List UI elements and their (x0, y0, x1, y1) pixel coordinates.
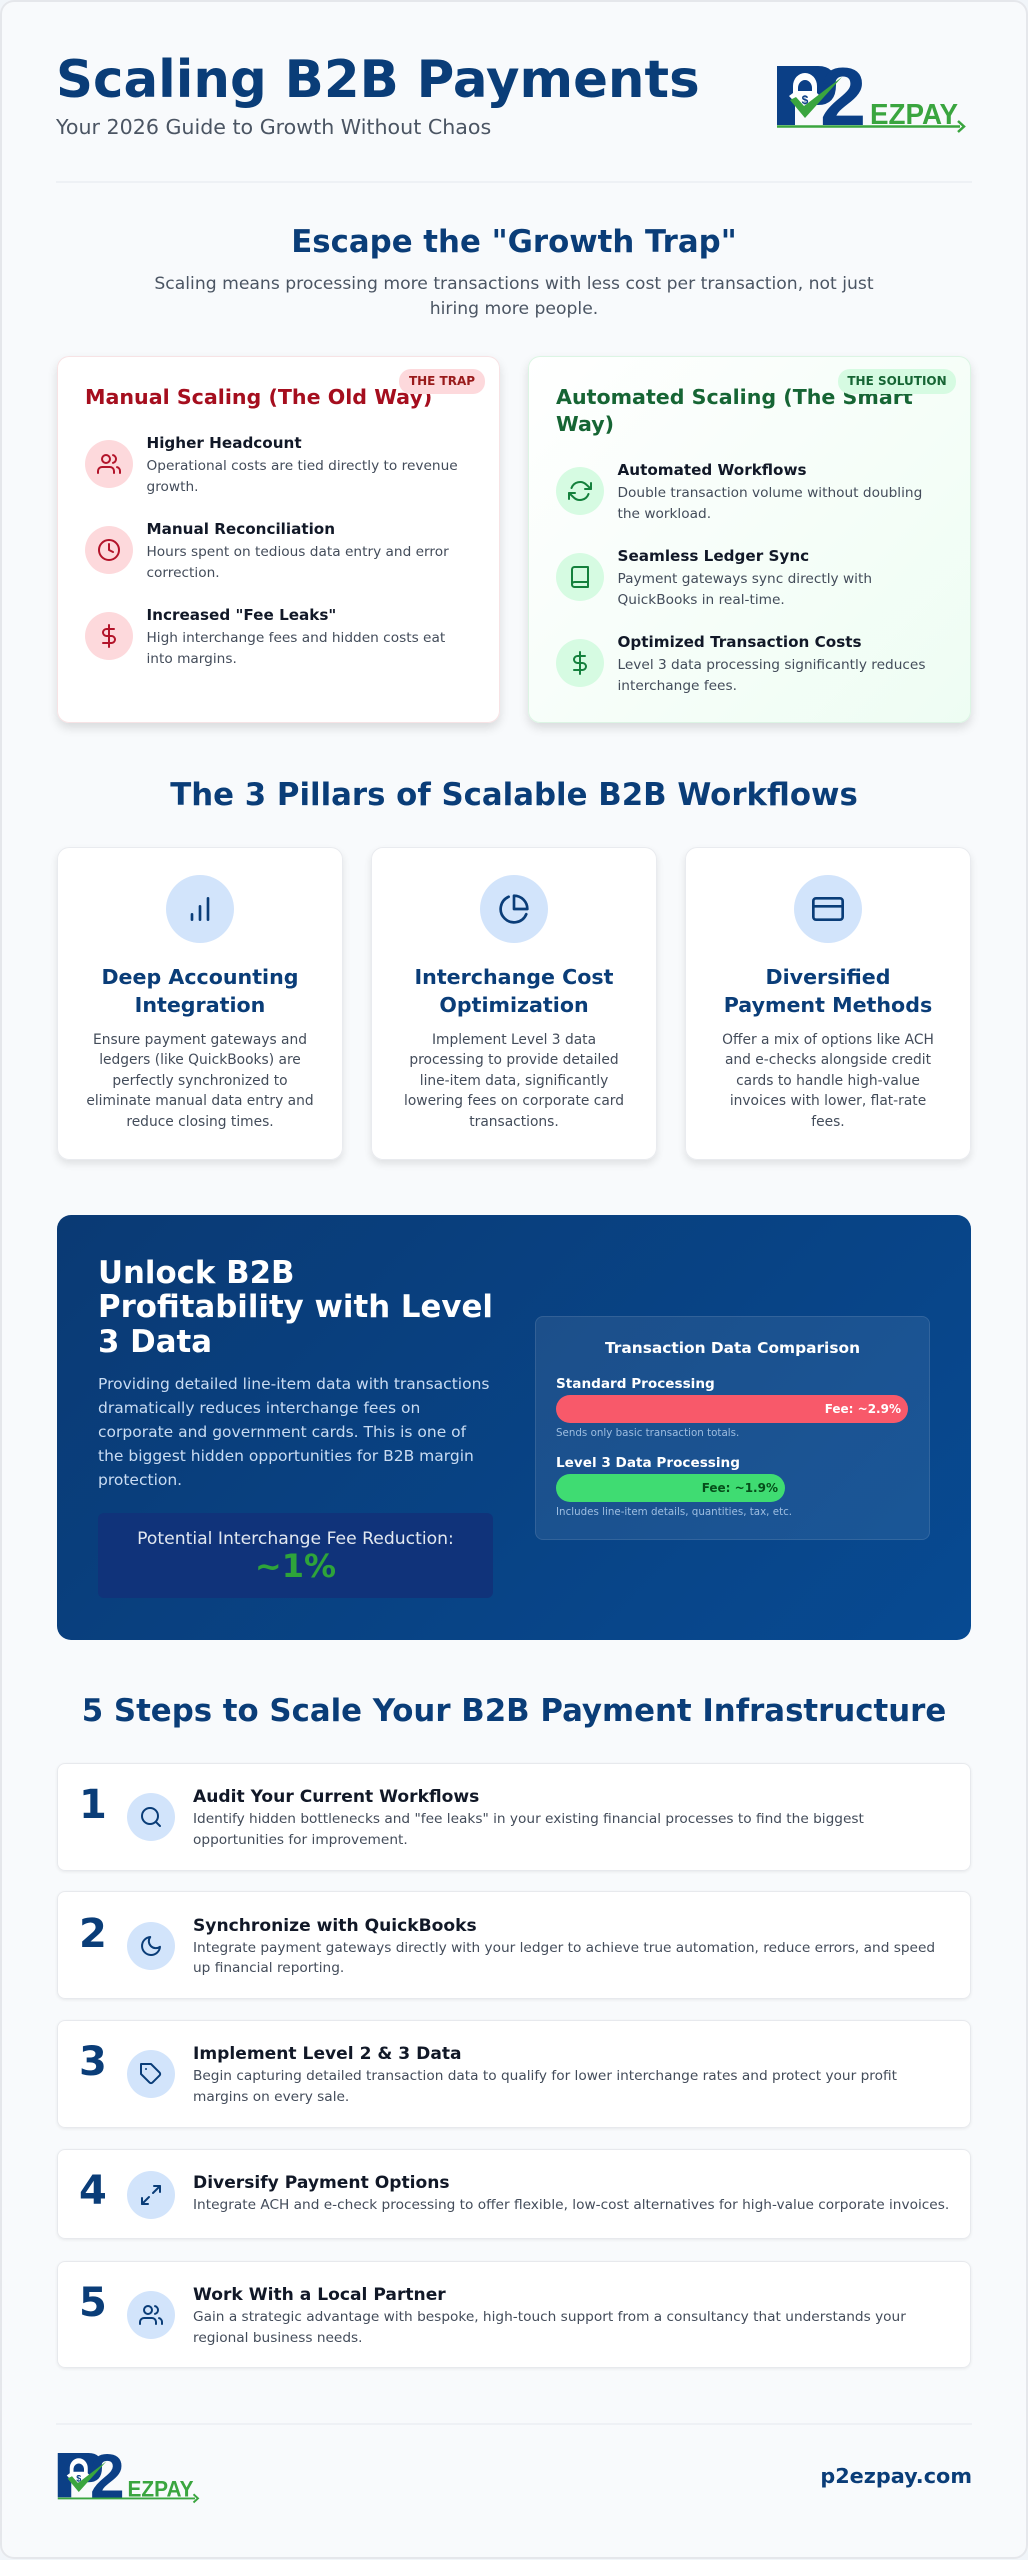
logo: P2 EZPAY footer (58, 2442, 200, 2508)
item text (618, 571, 872, 608)
step text (193, 1811, 864, 1848)
step 2 (57, 1891, 971, 1999)
item: automated workflows (556, 461, 922, 522)
pillar text: ledgers (like QuickBooks) are (99, 1052, 301, 1068)
pillar text (86, 1032, 314, 1130)
panel: pillar diversified payment methods (685, 847, 971, 1160)
icon: bar chart (166, 875, 234, 943)
intro text: Scaling means processing more transactions with less cost per transaction, not just (154, 274, 874, 294)
pillar text: Ensure payment gateways and (93, 1032, 307, 1048)
step title: Implement Level 2 & 3 Data (193, 2044, 462, 2064)
subtitle: Your 2026 Guide to Growth Without Chaos (56, 115, 491, 139)
step 3 (57, 2020, 971, 2128)
pillar text: transactions. (469, 1114, 559, 1130)
step title: Diversify Payment Options (193, 2173, 450, 2193)
icon: users (85, 440, 133, 488)
step text: regional business needs. (193, 2330, 363, 2346)
item text: the workload. (618, 506, 711, 522)
chart: transaction data comparison (535, 1316, 930, 1540)
item text: Double transaction volume without doubling (618, 485, 922, 501)
card heading: automated: Automated Scaling (The Smart (556, 384, 913, 408)
icon: tag (127, 2050, 175, 2098)
icon: book (556, 553, 604, 601)
item text: interchange fees. (618, 678, 737, 694)
step title: Work With a Local Partner (193, 2285, 446, 2305)
logo: P2 EZPAY footer: $ (76, 2474, 81, 2484)
icon: pie chart (480, 875, 548, 943)
step 5 (57, 2261, 971, 2368)
panel: automated scaling (528, 356, 971, 723)
item text: growth. (146, 478, 198, 494)
pillar text: processing to provide detailed (409, 1052, 619, 1068)
pillar text: fees. (811, 1114, 845, 1130)
intro text: hiring more people. (430, 298, 598, 318)
pillar text: reduce closing times. (126, 1114, 274, 1130)
icon: clock (85, 526, 133, 574)
panel text: the biggest hidden opportunities for B2B margin (98, 1446, 474, 1464)
panel text: corporate and government cards. This is one of (98, 1422, 466, 1440)
pillar title: Interchange Cost (415, 965, 613, 989)
item title: Increased "Fee Leaks" (146, 606, 336, 624)
logo: P2 EZPAY header (777, 50, 966, 140)
panel: pillar deep accounting integration (57, 847, 343, 1160)
step number: 1 (79, 1782, 107, 1828)
icon: search (127, 1793, 175, 1841)
pillar title: Optimization (439, 992, 589, 1016)
icon: dollar (556, 639, 604, 687)
step number: 2 (79, 1910, 107, 1956)
icon: moon (127, 1922, 175, 1970)
item text: Payment gateways sync directly with (618, 571, 872, 587)
panel: pillar interchange cost optimization (371, 847, 657, 1160)
step text: margins on every sale. (193, 2088, 349, 2104)
step text: opportunities for improvement. (193, 1832, 408, 1848)
title: Scaling B2B Payments (56, 50, 700, 110)
step text (193, 1940, 935, 1976)
pillar text (404, 1032, 624, 1130)
item title: Seamless Ledger Sync (618, 547, 809, 565)
item text (618, 657, 925, 694)
panel text: dramatically reduces interchange fees on (98, 1398, 420, 1416)
card heading: automated: Way) (556, 412, 614, 436)
icon: users (127, 2291, 175, 2339)
badge: the solution: THE SOLUTION (847, 374, 947, 388)
stat box (98, 1513, 493, 1598)
panel: manual scaling (57, 356, 500, 723)
pillar text: Implement Level 3 data (432, 1032, 596, 1048)
item: fee leaks (85, 606, 445, 666)
item text: QuickBooks in real-time. (618, 592, 785, 608)
icon: expand arrows (127, 2171, 175, 2219)
chart title: Transaction Data Comparison (605, 1338, 860, 1356)
item text (146, 544, 449, 580)
heading: 5 steps: 5 Steps to Scale Your B2B Payment Infrastructure (82, 1692, 946, 1728)
item title: Optimized Transaction Costs (618, 633, 862, 651)
panel text: Providing detailed line-item data with transactions (98, 1374, 489, 1392)
pillar text: Offer a mix of options like ACH (722, 1032, 934, 1048)
step 1 (57, 1763, 971, 1871)
item: higher headcount (85, 434, 458, 494)
item: manual reconciliation (85, 520, 449, 580)
item text: High interchange fees and hidden costs eat (146, 630, 445, 646)
stat value: ~1% (255, 1547, 336, 1585)
logo: P2 EZPAY header: EZPAY (870, 99, 958, 131)
pillar text: perfectly synchronized to (112, 1072, 288, 1088)
pillar text: and e-checks alongside credit (725, 1052, 931, 1068)
step text: Integrate payment gateways directly with your ledger to achieve true automation, reduce errors, and speed (193, 1940, 935, 1956)
item text (618, 485, 922, 522)
step text: Begin capturing detailed transaction data to qualify for lower interchange rates and protect your profit (193, 2068, 897, 2084)
heading: escape the growth trap: Escape the "Growth Trap" (291, 224, 737, 260)
panel: level 3 data call to action (57, 1215, 971, 1640)
pillar text: cards to handle high-value (736, 1072, 920, 1088)
item text: Hours spent on tedious data entry and error (146, 544, 449, 560)
stat label: Potential Interchange Fee Reduction: (137, 1529, 454, 1549)
pillar title: Integration (135, 992, 265, 1016)
pillar title: Payment Methods (724, 992, 932, 1016)
item title: Automated Workflows (618, 461, 807, 479)
step number: 5 (79, 2280, 107, 2326)
item text: Level 3 data processing significantly reduces (618, 657, 925, 673)
bar: level 3 processing: Fee: ~1.9% (702, 1481, 778, 1495)
badge: the trap: THE TRAP (409, 374, 475, 388)
step text (193, 2068, 897, 2104)
panel text (98, 1374, 489, 1488)
panel heading: 3 Data (98, 1324, 212, 1360)
item text: Operational costs are tied directly to revenue (146, 458, 458, 474)
item text: correction. (146, 564, 220, 580)
pillar title (724, 965, 932, 1016)
panel heading (98, 1254, 493, 1360)
panel heading: Unlock B2B (98, 1254, 294, 1290)
bar note: standard: Sends only basic transaction totals. (556, 1427, 739, 1439)
item text: into margins. (146, 650, 237, 666)
item: optimized transaction costs (556, 633, 925, 694)
step text: up financial reporting. (193, 1960, 344, 1976)
item title: Manual Reconciliation (146, 520, 335, 538)
item text (146, 630, 445, 666)
step title: Audit Your Current Workflows (193, 1787, 479, 1807)
pillar text: lowering fees on corporate card (404, 1093, 624, 1109)
badge: the solution (838, 369, 956, 394)
step text (193, 2309, 906, 2346)
step text: Identify hidden bottlenecks and "fee leaks" in your existing financial processes to find the biggest (193, 1811, 864, 1827)
step number: 4 (79, 2168, 107, 2214)
card heading: automated (556, 384, 913, 436)
step number: 3 (79, 2039, 107, 2085)
bar label: level 3: Level 3 Data Processing (556, 1455, 740, 1471)
bar: standard processing: Fee: ~2.9% (825, 1402, 901, 1416)
card heading: manual: Manual Scaling (The Old Way) (85, 384, 432, 408)
logo: P2 EZPAY footer: EZPAY (128, 2477, 194, 2502)
pillar text: eliminate manual data entry and (86, 1093, 314, 1109)
bar: level 3 processing (556, 1474, 785, 1502)
pillar text (722, 1032, 934, 1130)
logo: P2 EZPAY header: $ (802, 93, 809, 107)
header divider (56, 181, 972, 183)
footer divider (56, 2423, 972, 2425)
badge: the trap (399, 369, 485, 394)
panel text: protection. (98, 1470, 182, 1488)
pillar title: Deep Accounting (101, 965, 299, 989)
pillar title (415, 965, 613, 1016)
heading: 3 pillars: The 3 Pillars of Scalable B2B Workflows (170, 776, 858, 812)
panel heading: Profitability with Level (98, 1289, 493, 1325)
pillar text: invoices with lower, flat-rate (730, 1093, 926, 1109)
step 4 (57, 2149, 971, 2239)
step text: Gain a strategic advantage with bespoke, high-touch support from a consultancy that understands your (193, 2309, 906, 2325)
bar label: standard: Standard Processing (556, 1376, 715, 1392)
item text (146, 458, 458, 494)
intro text (154, 274, 874, 318)
item: seamless ledger sync (556, 547, 872, 608)
icon: credit card (794, 875, 862, 943)
bar note: level 3: Includes line-item details, quantities, tax, etc. (556, 1506, 792, 1518)
item title: Higher Headcount (146, 434, 302, 452)
step text: Integrate ACH and e-check processing to offer flexible, low-cost alternatives for high-value corporate invoices. (193, 2197, 949, 2213)
icon: refresh (556, 467, 604, 515)
footer website: p2ezpay.com (820, 2464, 972, 2488)
pillar text: line-item data, significantly (420, 1072, 608, 1088)
icon: dollar (85, 612, 133, 660)
pillar title: Diversified (766, 965, 890, 989)
pillar title (101, 965, 299, 1016)
step title: Synchronize with QuickBooks (193, 1916, 477, 1936)
bar: standard processing (556, 1395, 908, 1423)
